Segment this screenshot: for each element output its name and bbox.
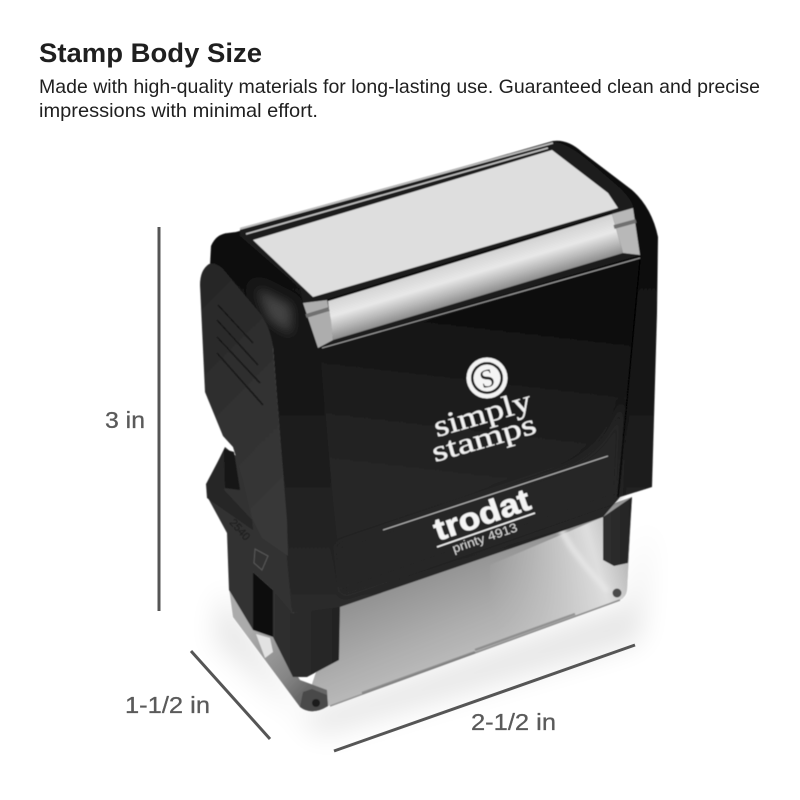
clear window outline highlights (240, 143, 553, 234)
simply stamps seal logo (466, 358, 508, 398)
moulded mark on side (227, 517, 268, 570)
trodat logo: printy 4913 (450, 520, 519, 556)
simply stamps seal logo: S (476, 363, 498, 394)
moulded mark on side: 2540 (227, 517, 252, 543)
trodat logo: trodat (429, 482, 535, 548)
description text: impressions with minimal effort. (39, 100, 318, 122)
roller (328, 214, 623, 340)
label window (253, 150, 618, 297)
simply stamps wordmark (428, 384, 540, 469)
dimension: depth: 1-1/2 in (125, 692, 210, 718)
side slot (253, 572, 273, 637)
simply stamps wordmark: simply (430, 384, 535, 444)
title: Stamp Body Size (39, 38, 262, 68)
right foot (603, 497, 632, 566)
roller dark top edge (328, 213, 612, 300)
right clear clip (612, 208, 640, 255)
front glossy panel (320, 260, 640, 593)
side frame, lower part (207, 447, 307, 677)
dimension: height: 3 in (105, 407, 145, 433)
ground shadow (215, 520, 650, 735)
side panel with grooves (200, 264, 288, 556)
stamp illustration (200, 141, 658, 735)
description text (39, 76, 760, 122)
clear top frame (240, 142, 640, 348)
main black body (210, 141, 658, 613)
side column highlight (255, 286, 292, 335)
description text: Made with high-quality materials for long-lasting use. Guaranteed clean and precise (39, 76, 760, 98)
panel swoosh (338, 400, 622, 593)
panel right edge (618, 260, 640, 497)
dimension: width: 2-1/2 in (471, 709, 556, 735)
panel divider line (383, 456, 608, 530)
simply stamps wordmark: stamps (428, 408, 540, 469)
left foot (273, 590, 340, 677)
panel top gloss (322, 258, 640, 348)
clear base (229, 497, 632, 711)
dimension: width (334, 645, 635, 751)
left clear clip (303, 300, 333, 348)
dimension: depth (125, 651, 270, 739)
